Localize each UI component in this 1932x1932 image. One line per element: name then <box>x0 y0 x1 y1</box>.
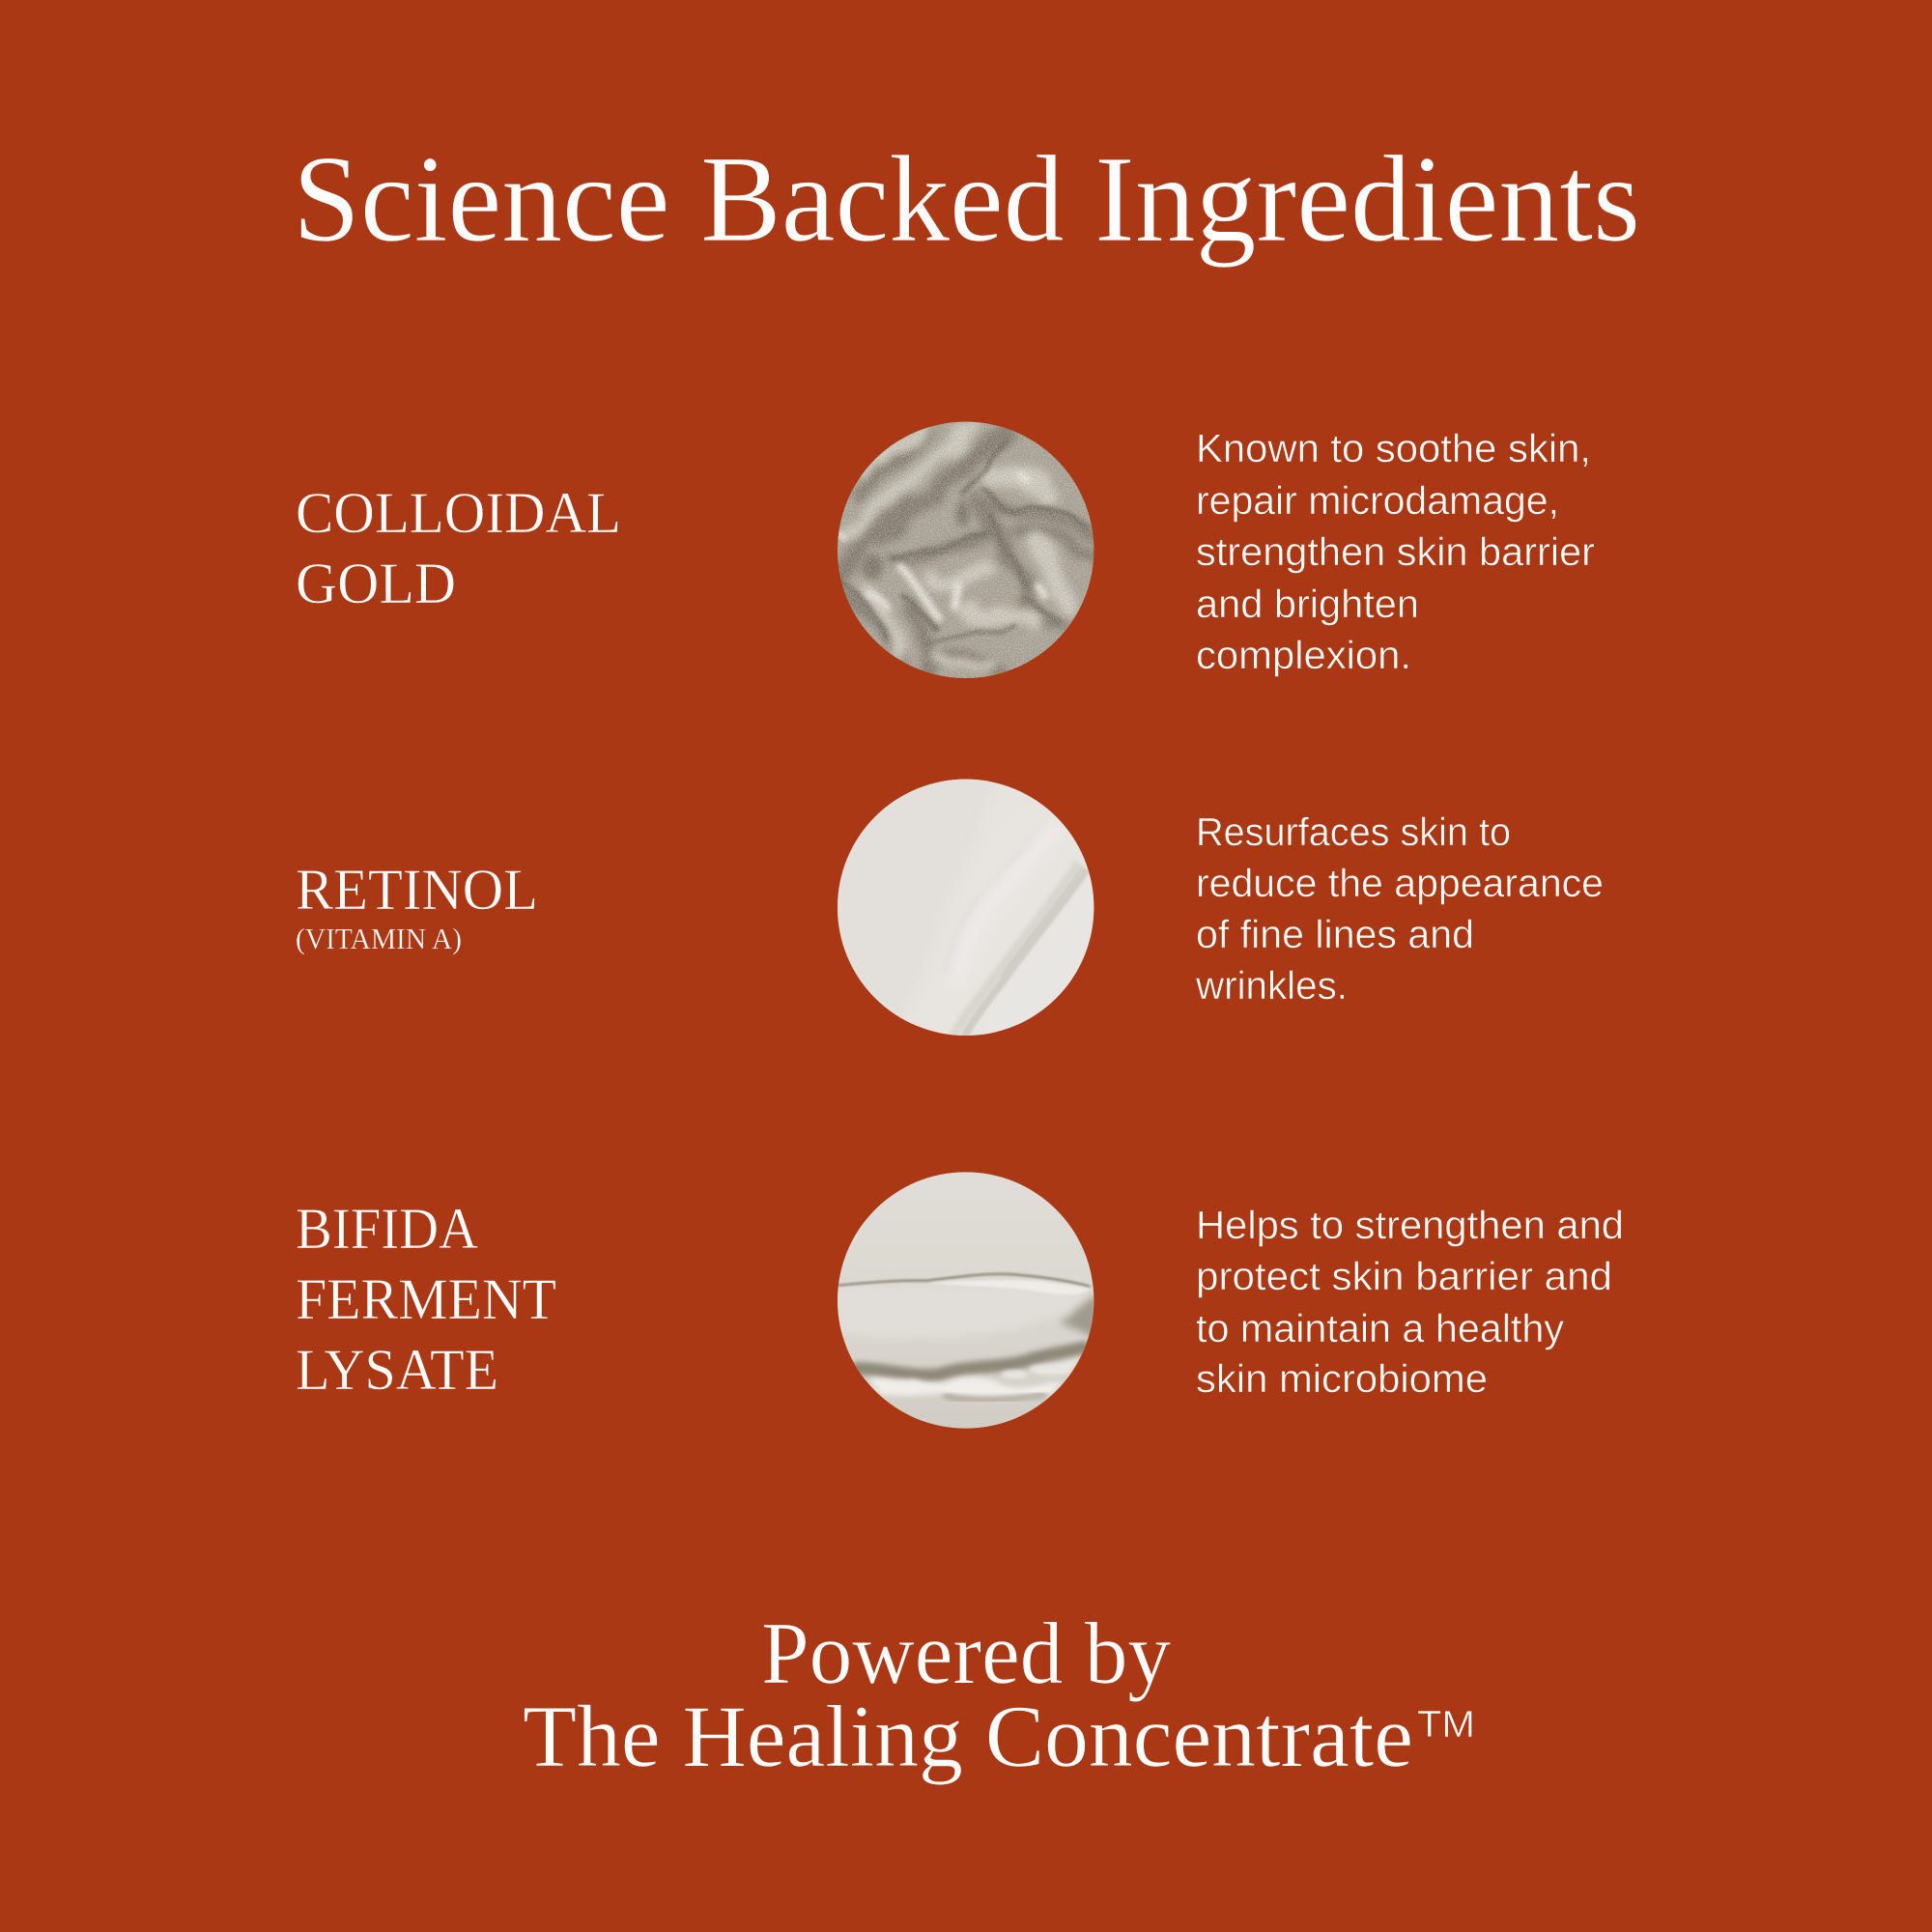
ingredient name: colloidal gold <box>296 481 621 615</box>
ingredient name: colloidal gold: COLLOIDAL <box>296 481 621 545</box>
title: Science Backed Ingredients <box>293 130 1640 268</box>
image: liquid ferment ripple circle <box>838 1172 1094 1429</box>
ingredient name: bifida ferment lysate: FERMENT <box>296 1267 556 1331</box>
description: colloidal gold: and brighten <box>1196 582 1419 626</box>
description: colloidal gold: Known to soothe skin, <box>1196 426 1591 470</box>
ingredient name: bifida ferment lysate <box>296 1197 556 1402</box>
ingredient name: bifida ferment lysate: BIFIDA <box>296 1197 478 1261</box>
ingredient name: retinol (vitamin a): RETINOL <box>296 858 538 922</box>
ingredient name: bifida ferment lysate: LYSATE <box>296 1338 498 1402</box>
description: colloidal gold: strengthen skin barrier <box>1196 529 1595 574</box>
ingredient row: bifida ferment lysate <box>298 1172 1621 1429</box>
footer tagline: TM <box>1417 1704 1475 1746</box>
ingredient row: colloidal gold <box>298 421 1594 678</box>
footer tagline <box>523 1605 1475 1785</box>
description: colloidal gold <box>1196 426 1595 677</box>
description: bifida ferment lysate: skin microbiome <box>1196 1356 1488 1401</box>
description: colloidal gold: complexion. <box>1196 633 1411 677</box>
description: colloidal gold: repair microdamage, <box>1196 478 1559 523</box>
description: bifida ferment lysate: protect skin barrier and <box>1196 1254 1612 1298</box>
ingredient name: colloidal gold: GOLD <box>296 552 456 615</box>
ingredient name: retinol (vitamin a): (VITAMIN A) <box>296 922 462 955</box>
description: bifida ferment lysate <box>1196 1203 1624 1401</box>
ingredient name: retinol (vitamin a) <box>296 858 538 955</box>
description: bifida ferment lysate: Helps to strengthen and <box>1196 1203 1624 1247</box>
description: retinol <box>1195 810 1604 1008</box>
footer tagline: The Healing Concentrate <box>523 1688 1413 1785</box>
description: bifida ferment lysate: to maintain a healthy <box>1196 1306 1564 1350</box>
footer tagline: Powered by <box>761 1605 1171 1702</box>
image: metallic gold swirl circle <box>838 421 1094 678</box>
image: clear retinol gel circle <box>838 779 1094 1036</box>
ingredient row: retinol <box>297 779 1602 1036</box>
description: retinol: Resurfaces skin to <box>1196 810 1511 854</box>
description: retinol: reduce the appearance <box>1196 861 1604 905</box>
description: retinol: wrinkles. <box>1195 963 1348 1008</box>
description: retinol: of fine lines and <box>1196 912 1474 956</box>
